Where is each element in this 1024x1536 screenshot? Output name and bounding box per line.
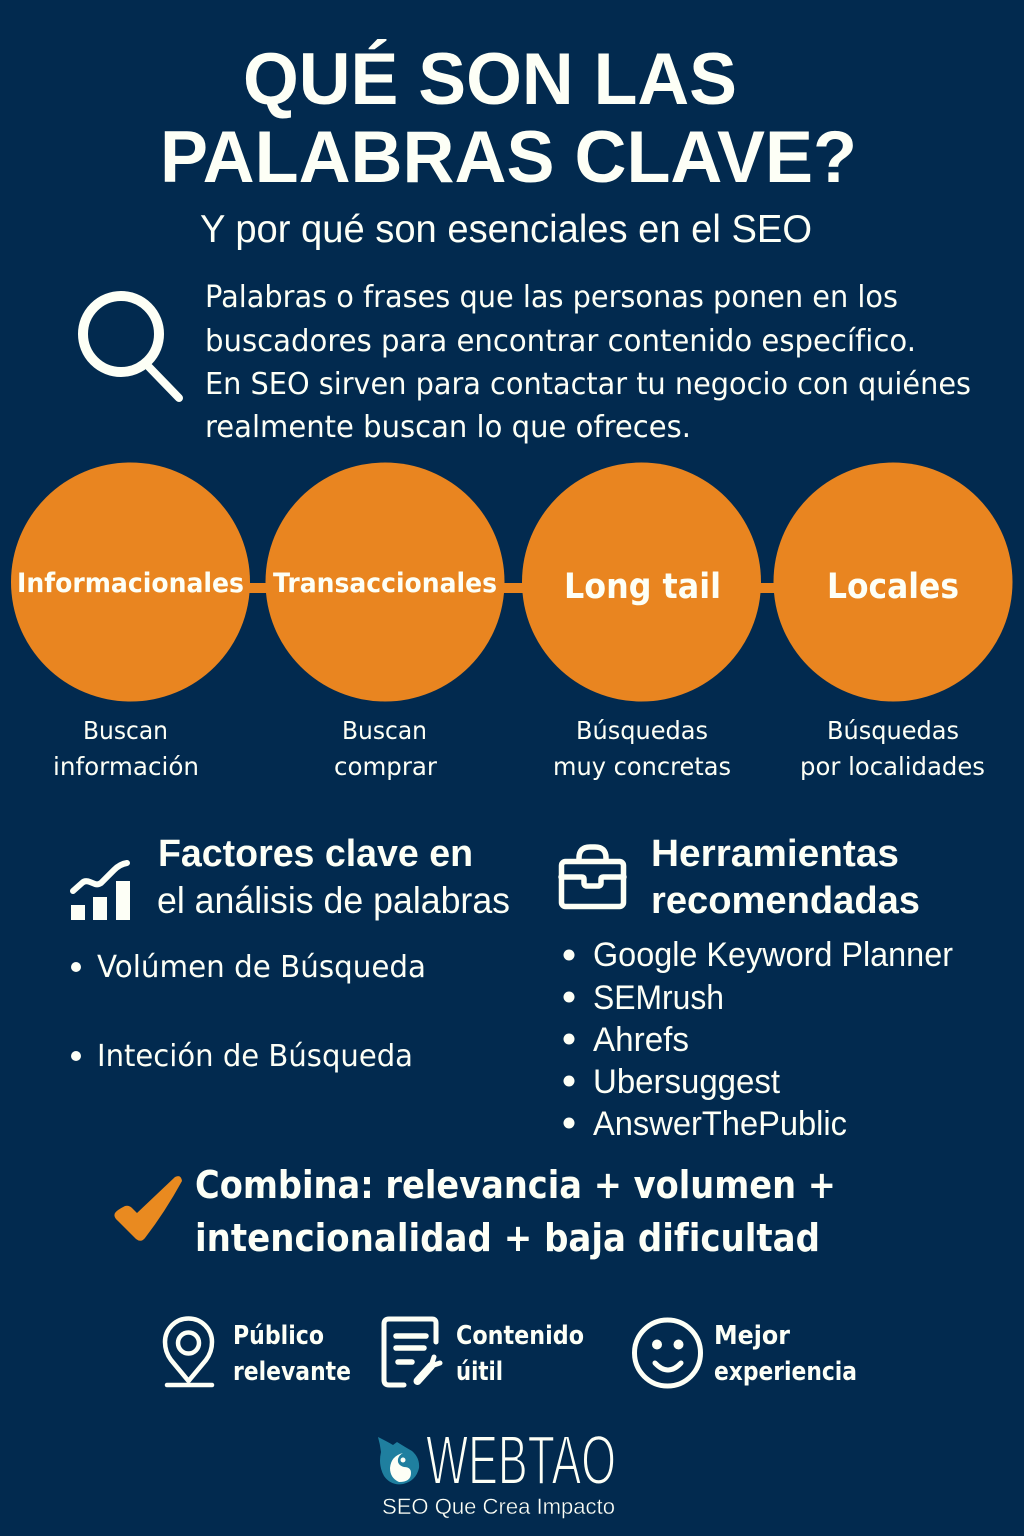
heading: factores clave — [157, 833, 510, 921]
circle: Long tail: Long tail — [564, 567, 721, 607]
circle: Locales — [774, 462, 1012, 702]
caption: Locales: Búsquedas — [827, 716, 959, 745]
definition text block: buscadores para encontrar contenido específico. — [205, 324, 916, 359]
title — [160, 39, 857, 198]
heading: factores clave: el análisis de palabras — [157, 880, 510, 921]
caption: Long tail: Búsquedas — [576, 716, 708, 745]
combina text: Combina: relevancia + volumen + — [195, 1163, 836, 1207]
title: QUÉ SON LAS — [243, 39, 737, 120]
circle: Informacionales — [11, 462, 250, 702]
definition text block: Palabras o frases que las personas ponen en los — [205, 280, 898, 315]
benefit: público relevante: Público — [233, 1321, 324, 1351]
caption: Transaccionales: comprar — [334, 752, 438, 781]
icon: growth chart — [71, 863, 130, 920]
benefit: público relevante — [233, 1321, 351, 1387]
caption: Informacionales — [53, 716, 199, 781]
definition text block: En SEO sirven para contactar tu negocio con quiénes — [205, 367, 971, 402]
caption: Locales — [800, 716, 985, 781]
caption: Informacionales: Buscan — [83, 716, 168, 745]
icon: logo flame — [378, 1437, 419, 1484]
benefit: contenido útil: úitil — [456, 1357, 503, 1387]
list: herramientas: Google Keyword Planner — [593, 936, 953, 974]
caption: Locales: por localidades — [800, 752, 985, 781]
caption: Transaccionales — [334, 716, 438, 781]
wordmark: WEBTAO — [426, 1421, 616, 1499]
definition text block: realmente buscan lo que ofreces. — [205, 410, 691, 445]
circle: Transaccionales — [266, 462, 504, 702]
benefit: mejor experiencia: Mejor — [714, 1321, 790, 1351]
list: herramientas: Ahrefs — [593, 1021, 689, 1059]
benefit: mejor experiencia: experiencia — [714, 1357, 857, 1387]
logo: WEBTAO — [378, 1421, 616, 1519]
heading: herramientas — [651, 833, 920, 922]
combina text: intencionalidad + baja dificultad — [195, 1216, 820, 1260]
circle: Transaccionales: Transaccionales — [273, 568, 497, 599]
title: PALABRAS CLAVE? — [160, 117, 857, 198]
icon: smiley — [634, 1320, 700, 1386]
icon: map pin — [165, 1318, 212, 1385]
circle: Locales: Locales — [827, 567, 959, 607]
icon: magnifying glass — [83, 296, 179, 398]
benefit: contenido útil: Contenido — [456, 1321, 584, 1351]
list: herramientas: AnswerThePublic — [593, 1105, 847, 1143]
caption: Long tail: muy concretas — [553, 752, 731, 781]
circle: Long tail — [522, 462, 761, 702]
subtitle: Y por qué son esenciales en el SEO — [200, 208, 812, 251]
benefit: mejor experiencia — [714, 1321, 857, 1387]
connector bars between circles — [240, 583, 780, 593]
list: herramientas — [564, 936, 953, 1143]
list: herramientas: SEMrush — [593, 979, 724, 1017]
list: factores: Volúmen de Búsqueda — [97, 950, 426, 985]
list: herramientas: Ubersuggest — [593, 1063, 781, 1101]
combina text — [195, 1163, 836, 1260]
heading: herramientas: recomendadas — [651, 880, 920, 922]
tagline: SEO Que Crea Impacto — [382, 1494, 615, 1519]
benefit: contenido útil — [456, 1321, 584, 1387]
icon: briefcase — [561, 847, 624, 906]
caption: Informacionales: información — [53, 752, 199, 781]
list: factores — [71, 950, 426, 1074]
list: factores: Inteción de Búsqueda — [97, 1039, 413, 1074]
heading: herramientas: Herramientas — [651, 833, 899, 875]
icon: orange check mark — [114, 1176, 182, 1241]
caption: Long tail — [553, 716, 731, 781]
heading: factores clave: Factores clave en — [158, 833, 473, 875]
caption: Transaccionales: Buscan — [342, 716, 427, 745]
circle: Informacionales: Informacionales — [17, 568, 244, 599]
definition text block — [205, 280, 971, 445]
icon: document with wrench — [384, 1319, 440, 1385]
benefit: público relevante: relevante — [233, 1357, 351, 1387]
